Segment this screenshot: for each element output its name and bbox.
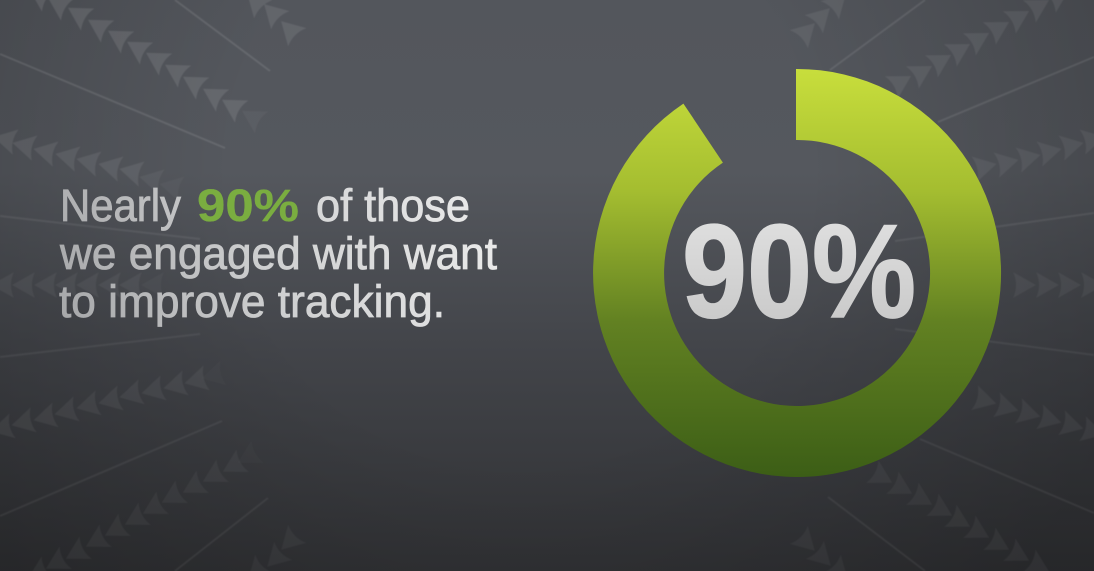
arrow row: bottom left inner: [239, 524, 307, 571]
arrow row: bottom right inner: [789, 525, 857, 571]
arrow row: upper left: [22, 0, 268, 134]
line 2: we engaged with want: [59, 228, 497, 279]
arrow row: top right: [789, 0, 855, 49]
arrow row: left middle: [0, 272, 164, 298]
arrow row: bottom right: [866, 460, 1056, 571]
statement text: [59, 180, 497, 327]
arrow row: right lower: [971, 385, 1094, 447]
arrow row: left upper: [0, 124, 185, 202]
line 1: [60, 180, 470, 231]
arrow row: right upper: [971, 124, 1094, 182]
arrow row: upper right: [885, 0, 1076, 99]
donut value: 90%: 90%: [682, 198, 916, 346]
line 3: to improve tracking.: [59, 276, 445, 327]
arrow row: bottom left: [21, 440, 264, 571]
arrow row: right middle: [1013, 272, 1094, 298]
donut chart: 90 percent ring: [593, 69, 1001, 477]
highlighted figure: 90%: 90%: [197, 180, 299, 231]
arrow row: top left: [238, 0, 307, 47]
line 1: Nearly: [60, 180, 181, 231]
arrow row: lower left: [0, 360, 227, 444]
line 1: of those: [316, 180, 470, 231]
